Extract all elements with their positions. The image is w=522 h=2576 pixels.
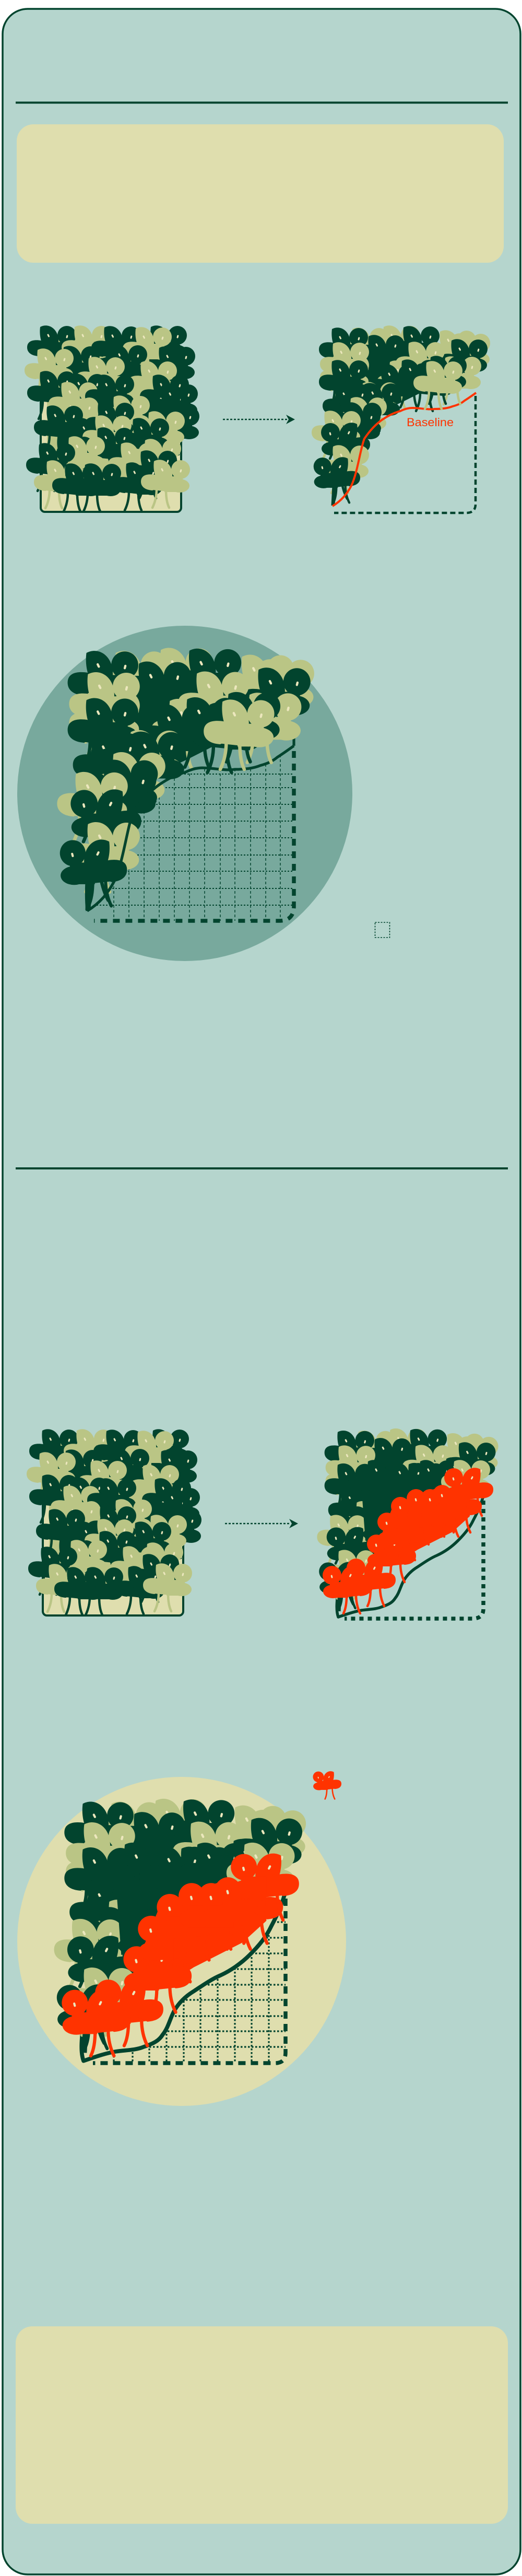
cut sprouts with baseline [312, 325, 490, 513]
sprouts with red invaders [317, 1428, 499, 1619]
intro text panel [17, 124, 504, 263]
grid under baseline [97, 756, 292, 921]
teal circle [17, 626, 352, 961]
enlarged sprouts with invaders [54, 1799, 306, 2061]
arrow: full to invaded [225, 1519, 298, 1528]
legend: grid cell [375, 922, 389, 938]
icon: red invader sprout [313, 1771, 341, 1799]
enlarged sprouts and baseline [57, 648, 314, 911]
plant tray: full sprouts second [27, 1429, 201, 1615]
cream circle [17, 1777, 346, 2106]
enlarged dashed boundary second [93, 1899, 286, 2063]
top divider [16, 101, 508, 103]
enlarged dashed boundary [94, 751, 294, 921]
baseline label: Baseline [407, 416, 454, 429]
conclusion text panel [16, 2326, 508, 2524]
middle divider [16, 1167, 508, 1169]
dotted grid under curve [113, 1921, 286, 2061]
plant tray: full sprouts [25, 325, 199, 512]
arrow: full to cut [223, 415, 295, 424]
